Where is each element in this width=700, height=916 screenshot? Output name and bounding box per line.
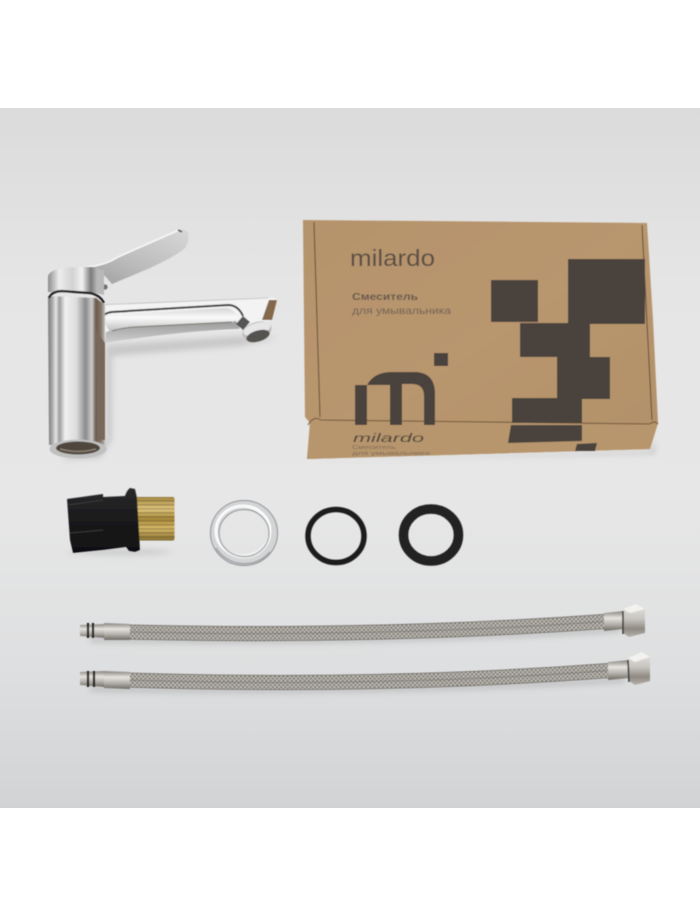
lever handle [85, 229, 189, 284]
pixel pattern graphic [491, 259, 645, 451]
product box [303, 220, 658, 460]
box lid face [303, 220, 658, 459]
brand name: milardo [350, 245, 435, 271]
cartridge cap [48, 267, 103, 294]
flap product text: Смеситель [352, 445, 397, 451]
box shadow [310, 440, 656, 460]
faucet shadow [60, 336, 278, 460]
flap product text [352, 445, 430, 457]
product title: Смеситель [352, 292, 418, 303]
hose nut lower [628, 652, 650, 685]
box front flap [307, 418, 658, 459]
aerator [240, 318, 274, 345]
spout [96, 298, 277, 343]
rubber gasket thin [308, 510, 364, 562]
chrome ring [210, 500, 278, 566]
faucet body [48, 296, 105, 445]
brass thread [134, 497, 174, 540]
m logo [355, 372, 435, 425]
product subtitle: для умывальника [352, 305, 451, 317]
flap product text: для умывальника [352, 451, 430, 457]
braided hose upper [80, 604, 645, 641]
braided hose lower [80, 652, 650, 691]
black plastic nut [67, 488, 140, 553]
faucet [48, 229, 278, 460]
hose nut upper [623, 604, 645, 637]
rubber gasket wide [404, 509, 458, 561]
flap brand name: milardo [353, 433, 425, 445]
photo background [0, 108, 700, 808]
base opening [50, 440, 106, 458]
logo dot [434, 353, 448, 366]
threaded adapter [67, 488, 174, 555]
